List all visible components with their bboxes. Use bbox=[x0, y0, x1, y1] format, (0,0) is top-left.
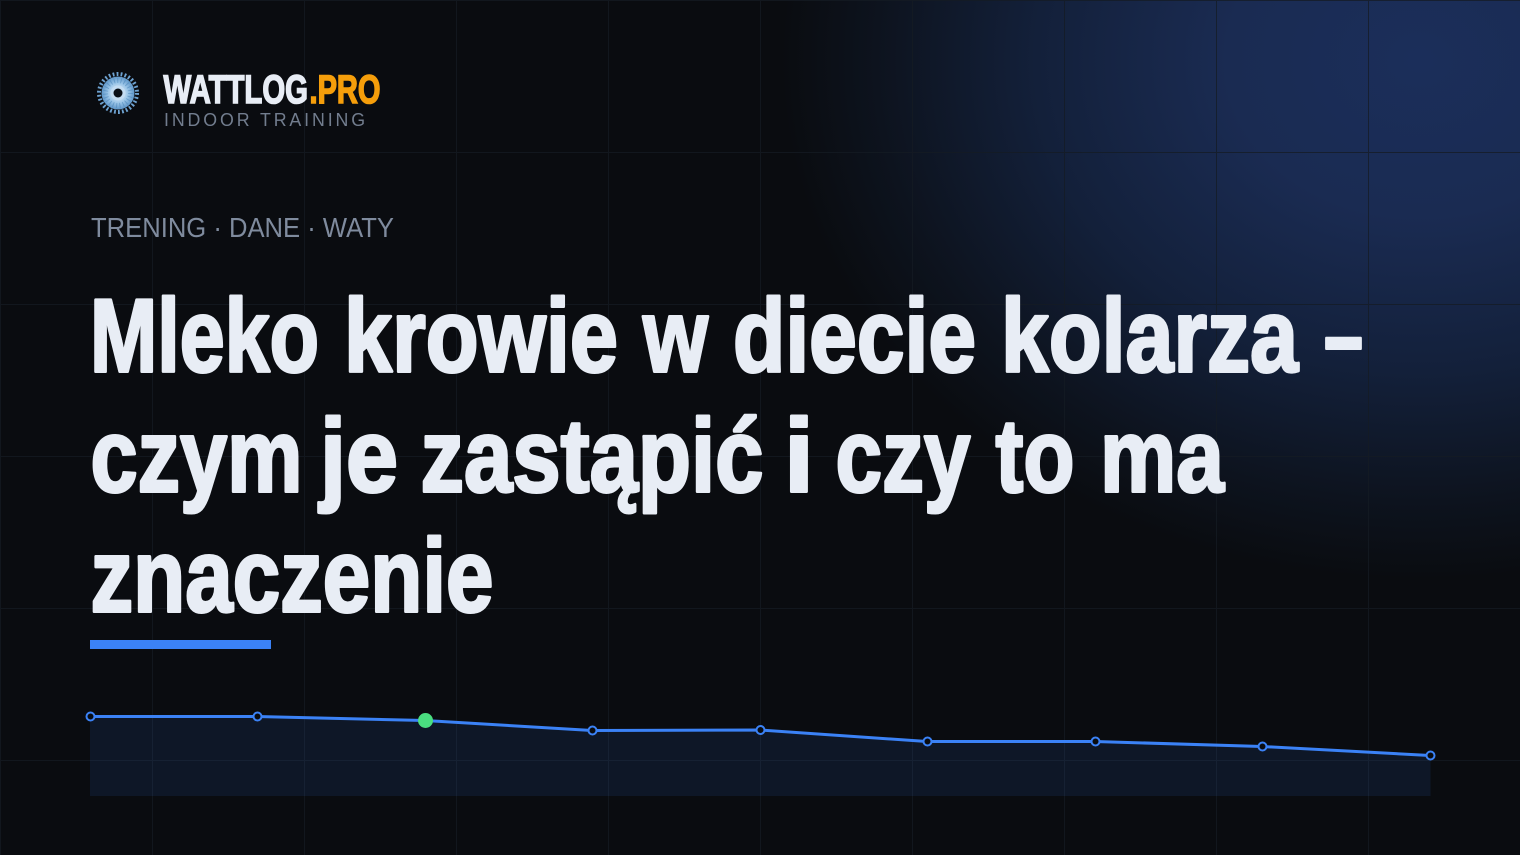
line chart bbox=[86, 712, 1434, 796]
logo bbox=[99, 68, 380, 130]
brand name: .PRO bbox=[310, 68, 380, 112]
title: kolarza bbox=[1001, 278, 1299, 394]
eyebrow: TRENING · DANE · WATY bbox=[91, 212, 394, 243]
chart line bbox=[90, 716, 1430, 756]
title: w bbox=[642, 278, 709, 394]
title: Mleko bbox=[90, 278, 319, 394]
title: krowie bbox=[344, 278, 618, 394]
highlighted marker bbox=[418, 713, 433, 728]
icon: cassette cog bbox=[99, 74, 137, 112]
title: czym bbox=[90, 398, 302, 514]
title: – bbox=[1324, 278, 1363, 394]
tagline: INDOOR TRAINING bbox=[164, 109, 368, 130]
title: i bbox=[784, 398, 814, 514]
title: diecie bbox=[733, 278, 976, 394]
title bbox=[90, 278, 1363, 634]
chart markers bbox=[86, 712, 1434, 760]
brand name: WATTLOG bbox=[164, 68, 308, 112]
title underline bbox=[90, 640, 271, 649]
title: czy bbox=[836, 398, 971, 514]
title: ma bbox=[1100, 398, 1225, 514]
title: zastąpić bbox=[420, 398, 764, 514]
title: to bbox=[996, 398, 1074, 514]
title: znaczenie bbox=[90, 518, 494, 634]
chart area fill bbox=[90, 716, 1430, 796]
title: je bbox=[318, 398, 398, 514]
